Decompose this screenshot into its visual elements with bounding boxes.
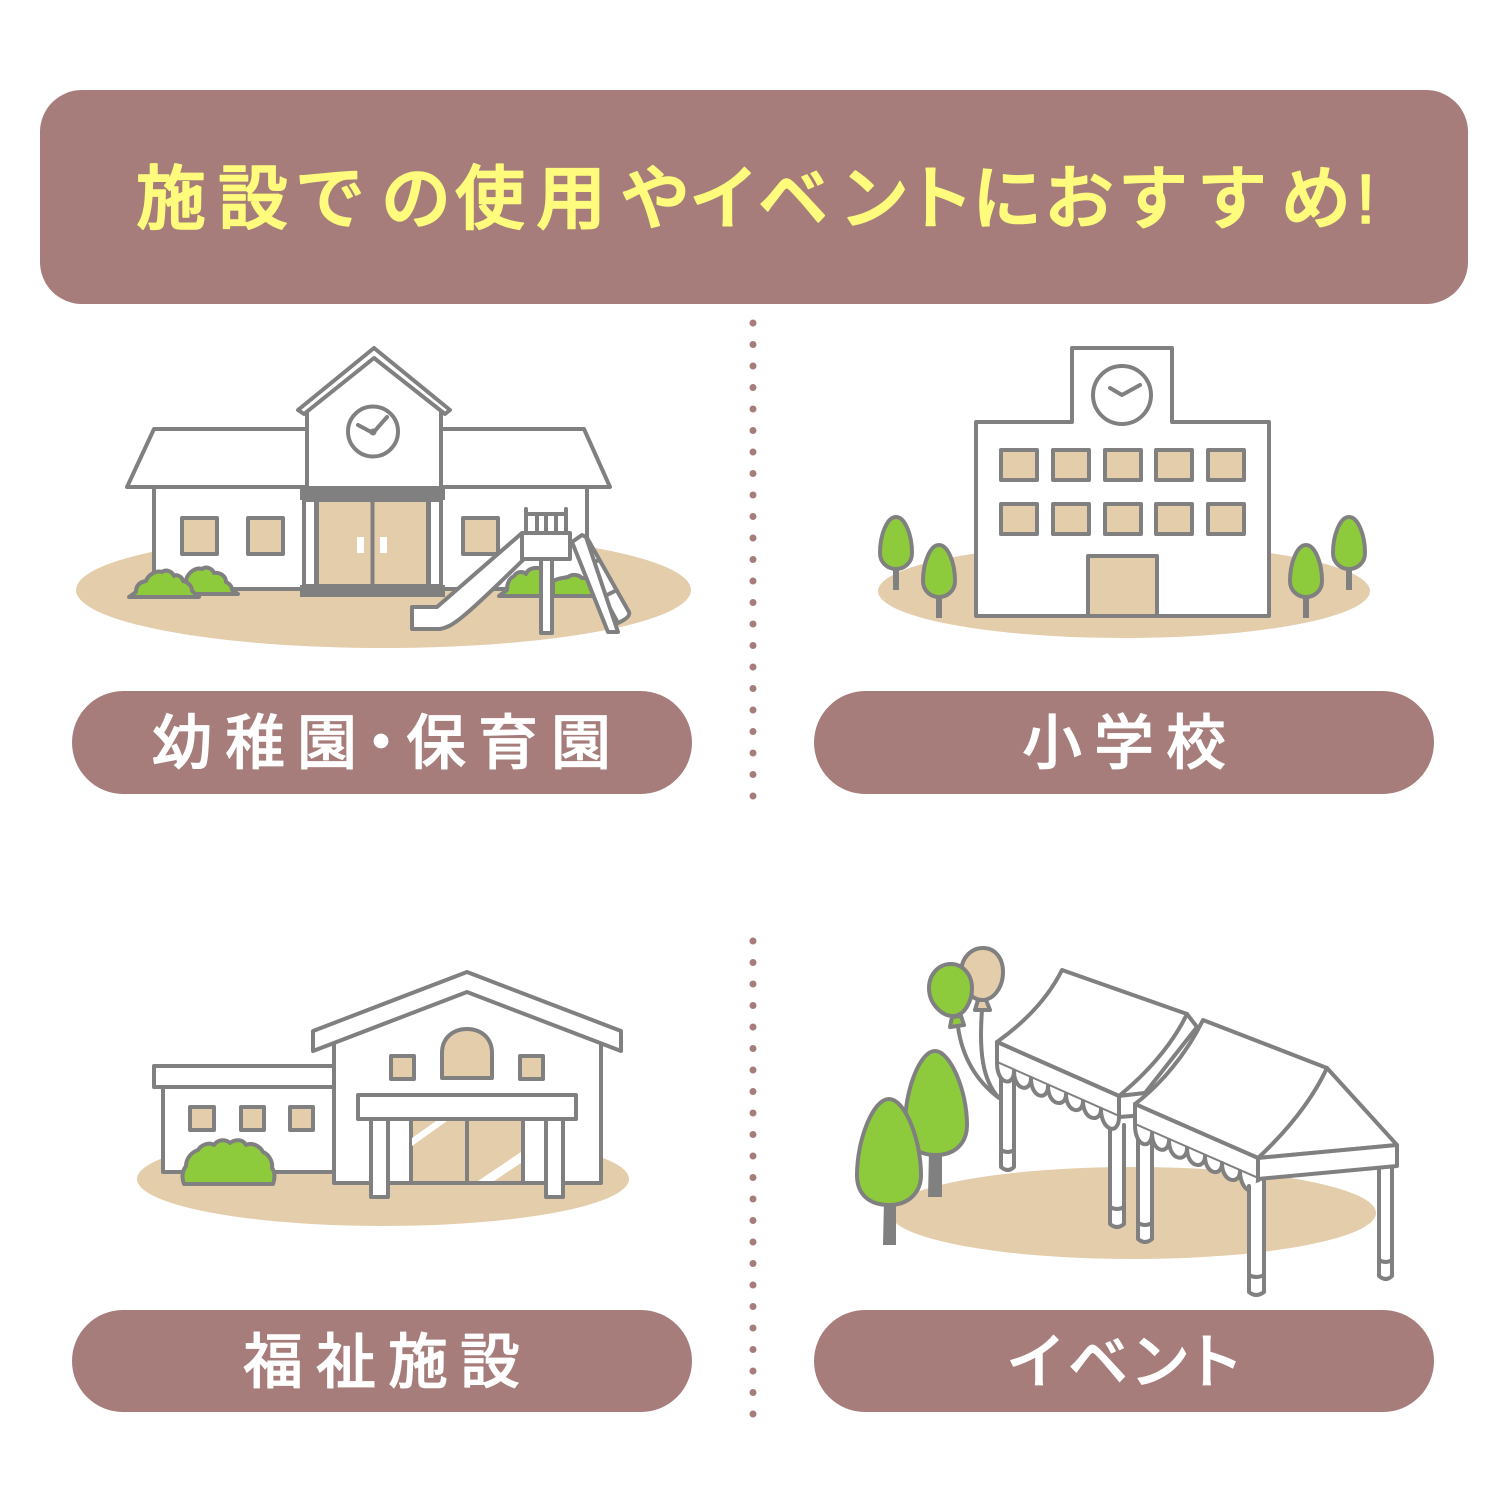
label: kindergarten: 幼稚園・保育園 [152,710,611,777]
clock tower [298,348,450,488]
ground [137,1132,629,1226]
ground [76,532,691,648]
label: event [814,1310,1434,1412]
tent right [1135,1020,1397,1295]
bushes right [499,568,613,596]
label: event: イベント [1006,1329,1244,1396]
panel: kindergarten illustration [76,348,691,648]
slide [412,533,523,629]
building wings [127,429,610,589]
tent left [997,970,1197,1129]
trees [857,1051,967,1245]
panel: welfare facility illustration [137,972,629,1226]
windows [182,518,498,554]
panel: event illustration [857,948,1397,1295]
school building [976,348,1269,616]
ground [890,1167,1376,1259]
balloons [929,948,1003,1098]
shrub [183,1140,274,1184]
main hall [313,972,621,1197]
tent legs back [1001,1070,1392,1279]
label: welfare facility [72,1310,692,1412]
label: elementary school [814,691,1434,794]
panel: elementary school illustration [878,348,1370,638]
title: 施設での使用やイベントにおすすめ! [136,160,1375,238]
label: kindergarten [72,691,692,794]
playground tower [522,509,629,633]
entrance [300,488,445,597]
annex [154,1066,334,1172]
title banner [40,90,1468,304]
ground [878,544,1370,638]
bushes left [129,568,238,597]
label: elementary school: 小学校 [1022,710,1226,777]
label: welfare facility: 福祉施設 [243,1329,520,1396]
divider: top dotted line [750,323,756,798]
trees [880,517,1365,618]
divider: bottom dotted line [750,941,756,1416]
